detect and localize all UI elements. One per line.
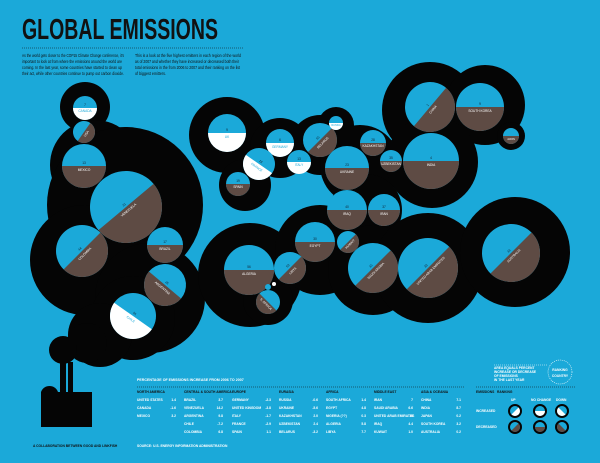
China: 1	[426, 103, 430, 107]
UK	[208, 114, 246, 152]
China: CHINA	[428, 104, 438, 115]
data table: KUWAIT	[374, 430, 387, 434]
data table: SPAIN	[232, 430, 242, 434]
data table: 0.2	[456, 430, 461, 434]
data table: EURASIA	[279, 390, 294, 394]
Iraq: IRAQ	[343, 212, 351, 216]
intro text right: of biggest emitters.	[135, 71, 166, 76]
Canada: CANADA	[78, 109, 93, 113]
data table: 0.3	[361, 414, 366, 418]
France: 18	[258, 159, 264, 164]
Kuwait	[332, 226, 364, 258]
legend key: DOWN	[556, 398, 567, 402]
data table: BRAZIL	[184, 398, 196, 402]
Kuwait: KUWAIT	[344, 238, 356, 250]
UAE: 33	[423, 263, 429, 269]
Colombia: 44	[77, 246, 83, 252]
data table: FRANCE	[232, 422, 247, 426]
Kazakhstan: 28	[371, 138, 375, 142]
legend note: OF EMISSIONS	[494, 374, 519, 378]
credit: A COLLABORATION BETWEEN GOOD AND LINKFISH	[33, 444, 118, 448]
data table: COLOMBIA	[184, 430, 203, 434]
Canada: 7	[84, 103, 86, 107]
South Korea: SOUTH KOREA	[468, 109, 492, 113]
Egypt: 30	[313, 237, 317, 241]
data table: 18	[409, 414, 413, 418]
data table: 2.0	[313, 414, 318, 418]
Chile: CHILE	[126, 315, 136, 324]
Argentina: ARGENTINA	[154, 281, 172, 296]
intro text left: coming. In the last year, some countries have started to clean up	[22, 65, 122, 70]
Russia	[329, 116, 343, 130]
Russia: RUSSIA	[331, 124, 341, 127]
Japan: JAPAN	[507, 138, 515, 141]
data table	[137, 390, 461, 434]
data table: 1.4	[171, 398, 176, 402]
Colombia: COLOMBIA	[77, 246, 93, 261]
Algeria: ALGERIA	[242, 272, 257, 276]
Libya: LIBYA	[288, 266, 298, 275]
data table: -5.6	[312, 406, 318, 410]
data table: CENTRAL & SOUTH AMERICA	[184, 390, 232, 394]
Belarus	[296, 116, 344, 164]
data table: BELARUS	[279, 430, 296, 434]
Italy: 13	[297, 157, 301, 161]
France	[237, 142, 281, 186]
Spain	[226, 172, 250, 196]
table title: PERCENTAGE OF EMISSIONS INCREASE FROM 2006 TO 2007	[137, 378, 244, 382]
data table: CHINA	[421, 398, 432, 402]
data table: 3.7	[218, 398, 223, 402]
intro text left: their act, while other countries continue to pump out carbon dioxide.	[22, 71, 124, 76]
France: FRANCE	[250, 162, 263, 173]
Belarus: BELARUS	[316, 136, 330, 150]
data table: IRAN	[374, 398, 383, 402]
Canada	[73, 96, 97, 120]
legend key: EMISSIONS	[476, 390, 495, 394]
data table: EGYPT	[326, 406, 337, 410]
Spain: SPAIN	[233, 185, 243, 189]
South Korea: 9	[479, 102, 481, 106]
Ukraine	[325, 146, 369, 190]
Australia	[470, 212, 552, 294]
data table: 14.2	[217, 406, 223, 410]
data table: 0.2	[456, 414, 461, 418]
legend key: DECREASED	[476, 425, 497, 429]
Kazakhstan: KAZAKHSTAN	[362, 144, 384, 148]
Venezuela: 31	[121, 202, 127, 207]
data table: MIDDLE EAST	[374, 390, 396, 394]
data table: 2.4	[313, 422, 318, 426]
Libya	[267, 245, 313, 291]
Italy	[287, 150, 311, 174]
Brazil: BRAZIL	[159, 247, 171, 251]
Venezuela: VENEZUELA	[120, 202, 138, 218]
Saudi Arabia: SAUDI ARABIA	[367, 261, 386, 280]
data table: SOUTH KOREA	[421, 422, 446, 426]
legend note: INCREASE OR DECREASE	[494, 370, 537, 374]
data table: 7.1	[456, 398, 461, 402]
data table: AUSTRALIA	[421, 430, 441, 434]
Argentina: 26	[164, 280, 170, 286]
legend note: IN THE LAST YEAR	[494, 378, 525, 382]
USA	[69, 117, 99, 147]
data table: KAZAKHSTAN	[279, 414, 302, 418]
Chile: 51	[132, 311, 138, 316]
data table: -1.6	[170, 406, 176, 410]
data table: VENEZUELA	[184, 406, 205, 410]
Colombia	[45, 214, 119, 288]
data table: RUSSIA	[279, 398, 292, 402]
data table: -3.2	[312, 430, 318, 434]
data table: SAUDI ARABIA	[374, 406, 398, 410]
data table: UZBEKISTAN	[279, 422, 301, 426]
Egypt: EGYPT	[310, 244, 320, 248]
Italy: ITALY	[295, 163, 304, 167]
UAE	[386, 226, 470, 310]
Iran: IRAN	[380, 212, 389, 216]
data table: NORTH AMERICA	[137, 390, 166, 394]
data table: JAPAN	[421, 414, 433, 418]
Australia: 16	[506, 248, 512, 254]
Belarus: 65	[315, 135, 321, 141]
Spain: 19	[236, 179, 240, 183]
intro text right: This is a look at the five highest emitters in each region of the world	[135, 53, 241, 58]
legend key: UP	[511, 398, 516, 402]
legend key: INCREASED	[476, 409, 496, 413]
data table: 9.8	[218, 414, 223, 418]
UAE: UNITED ARAB EMIRATES	[416, 256, 446, 286]
data table: UNITED STATES	[137, 398, 164, 402]
factory	[41, 362, 92, 427]
data table: AFRICA	[326, 390, 339, 394]
Algeria: 56	[247, 265, 251, 269]
data table: EUROPE	[232, 390, 247, 394]
Nigeria tiny	[265, 282, 276, 290]
Iraq	[327, 190, 367, 230]
data table: 1.4	[361, 398, 366, 402]
Brazil: 17	[163, 240, 167, 244]
data table: -0.6	[312, 398, 318, 402]
data table: CHILE	[184, 422, 195, 426]
Egypt	[295, 222, 335, 262]
Ukraine: UKRAINE	[340, 170, 354, 174]
legend note	[494, 360, 572, 384]
Brazil	[147, 227, 183, 263]
data table: IRAQ	[374, 422, 383, 426]
Venezuela	[75, 156, 177, 258]
data table: GERMANY	[232, 398, 250, 402]
China	[395, 72, 465, 142]
data table: 4.8	[361, 406, 366, 410]
intro text right: as of 2007 and whether they have increased or decreased both their	[135, 59, 239, 64]
data table: 8.7	[456, 406, 461, 410]
legend key: RANKING	[497, 390, 513, 394]
data table: 3.2	[456, 422, 461, 426]
data table: -3.8	[265, 406, 271, 410]
data table: UNITED KINGDOM	[232, 406, 261, 410]
data table: CANADA	[137, 406, 152, 410]
country bubbles	[45, 72, 552, 348]
South Korea	[456, 83, 504, 131]
data table: -2.9	[265, 422, 271, 426]
Chile	[101, 284, 165, 348]
legend note: AREA EQUALS PERCENT	[494, 366, 535, 370]
data table: UNITED ARAB EMIRATES	[374, 414, 415, 418]
Mexico: MEXICO	[78, 168, 91, 172]
intro text right	[135, 53, 241, 76]
Iran: 37	[382, 205, 386, 209]
legend note: RANKING	[552, 368, 568, 372]
Uzbekistan	[380, 150, 402, 172]
UK: UK	[225, 135, 230, 139]
Saudi Arabia	[338, 233, 408, 303]
data table: ALGERIA	[326, 422, 341, 426]
data table: 4.4	[408, 422, 413, 426]
data table: LIBYA	[326, 430, 336, 434]
Mexico	[62, 144, 106, 188]
South Africa	[251, 285, 285, 319]
data table: 5.8	[361, 422, 366, 426]
South Africa: S. AFRICA	[259, 297, 273, 312]
Uzbekistan: UZBEKISTAN	[381, 162, 402, 166]
Iraq: 40	[345, 205, 349, 209]
Uzbekistan: 35	[389, 156, 393, 160]
smoke cloud	[30, 62, 570, 367]
data table: ASIA & OCEANIA	[421, 390, 449, 394]
data table: 1.1	[266, 430, 271, 434]
Japan	[503, 128, 519, 144]
India: INDIA	[427, 163, 436, 167]
Argentina	[135, 255, 195, 315]
data table: 7	[411, 398, 413, 402]
data table: SOUTH AFRICA	[326, 398, 351, 402]
data table: 7.7	[361, 430, 366, 434]
Algeria	[224, 245, 274, 295]
data table: ARGENTINA	[184, 414, 204, 418]
Germany: 6	[279, 138, 281, 142]
intro text left: important to look at from where the emissions around the world are	[22, 59, 122, 64]
India	[403, 133, 459, 189]
data table: ITALY	[232, 414, 242, 418]
data table: -2.3	[265, 398, 271, 402]
data table: 6.6	[408, 406, 413, 410]
data table: 3.2	[171, 414, 176, 418]
data table: -1.7	[265, 414, 271, 418]
data table: 6.8	[218, 430, 223, 434]
India: 4	[430, 156, 432, 160]
data table: UKRAINE	[279, 406, 295, 410]
legend note: COUNTRY	[552, 374, 569, 378]
intro text left: As the world gets closer to the COP15 Climate Change conference, it's	[22, 53, 124, 58]
intro text left	[22, 53, 124, 76]
Mexico: 13	[82, 161, 86, 165]
data table: -7.2	[217, 422, 223, 426]
data table: MEXICO	[137, 414, 150, 418]
data table: NIGERIA (??)	[326, 414, 347, 418]
Ukraine: 23	[345, 163, 349, 167]
USA: USA	[83, 129, 90, 138]
UK: 9	[226, 128, 228, 132]
data table: 1.0	[408, 430, 413, 434]
data table: INDIA	[421, 406, 431, 410]
source: SOURCE: U.S. ENERGY INFORMATION ADMINISTRATION	[137, 444, 228, 448]
title: GLOBAL EMISSIONS	[22, 14, 218, 46]
Iran	[368, 194, 400, 226]
Saudi Arabia: 15	[368, 263, 374, 269]
legend key: NO CHANGE	[531, 398, 552, 402]
legend key	[476, 387, 576, 435]
Libya: 59	[285, 263, 291, 269]
Kazakhstan	[360, 130, 386, 156]
Australia: AUSTRALIA	[506, 248, 522, 264]
intro text right: total emissions in the from 2006 to 2007 and their ranking on the list	[135, 65, 241, 70]
Germany: GERMANY	[272, 145, 289, 149]
Germany	[266, 129, 294, 157]
